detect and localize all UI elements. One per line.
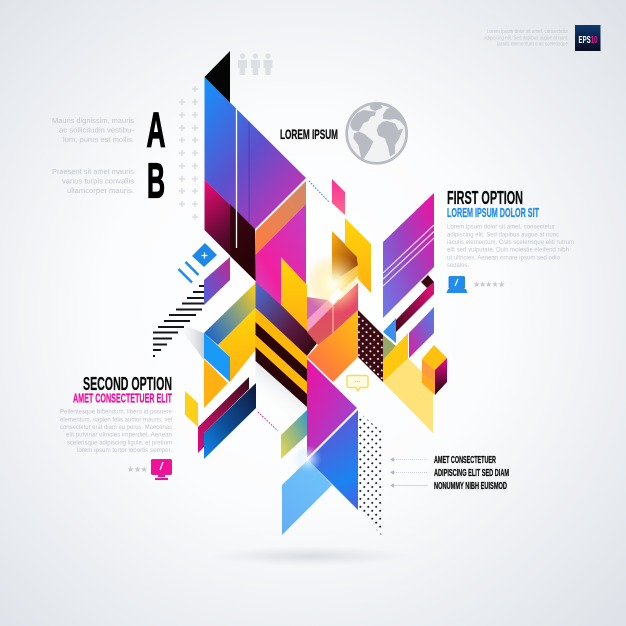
letter A: A: [146, 104, 166, 158]
shape: yellow stripes: [256, 308, 307, 369]
shape: tan band: [256, 181, 306, 255]
arrow row one: AMET CONSECTETUER: [434, 455, 496, 466]
shape: orange lower panel: [307, 310, 358, 382]
shape: light blue parallelogram: [282, 460, 332, 535]
shape: dark red band: [396, 275, 434, 332]
shape: small purple panel: [204, 257, 230, 305]
icon: cube: [422, 345, 447, 395]
shape: yellow center bar: [281, 257, 307, 331]
text block: left notes: ullamcorper mauris.: [67, 186, 134, 195]
paragraph: second option: elit pulvinar ultricies imperdiet. Aenean: [66, 432, 172, 439]
text block: top right note: adipiscing elit. Sed dapibus augue at nunc: [484, 36, 568, 42]
rating stars: five: ★: [498, 280, 505, 289]
paragraph: second option: [60, 408, 172, 454]
shape: pink small bar: [332, 179, 345, 215]
icon: laptop: [446, 276, 468, 293]
list: three labelled arrows: [390, 455, 509, 492]
rating stars: three: ★: [140, 465, 148, 474]
rating stars: five: ★: [485, 280, 492, 289]
rating stars: five: ★: [492, 280, 499, 289]
subheading: amet consectetuer elit: AMET CONSECTETUER ELIT: [73, 391, 172, 405]
rating stars: five: ★: [473, 280, 480, 289]
glow: blue light: [294, 445, 322, 473]
shape: dark vertical strip: [230, 204, 256, 281]
text block: left notes: Mauris dignissim, mauris: [52, 116, 134, 125]
text block: left notes: varius turpis convallis: [62, 176, 134, 186]
icon: three people: [238, 53, 272, 75]
badge: EPS 10: [575, 25, 600, 51]
shape: magenta dark bar: [198, 377, 249, 453]
icon: blue diamond with plus: [192, 243, 217, 267]
heading: first option: FIRST OPTION: [447, 188, 523, 208]
shadow under left blocks: [175, 322, 204, 360]
shape: lilac and peach centre: [307, 297, 328, 320]
shape: purple blue small panel: [409, 307, 434, 358]
shape: large blue purple block: [204, 77, 306, 229]
paragraph: first option: Lorem ipsum dolor sit amet, consectetur: [447, 224, 555, 230]
shape: blue left block: [204, 333, 230, 382]
paragraph: first option: elit sed vulputate. Duis molestie eleifend nibh: [447, 247, 569, 254]
shape: blue lower block: [308, 410, 358, 510]
paragraph: first option: adipiscing elit. Sed dapibus augue at nunc: [447, 231, 559, 238]
text block: top right note: Lorem ipsum dolor sit amet, consectetur: [487, 29, 568, 35]
dotted line pink: [258, 412, 278, 431]
text block: left notes: lum, purus est mollis.: [63, 135, 134, 144]
black hatching stripes: [153, 286, 204, 356]
shape: magenta lower triangle: [307, 359, 357, 457]
paragraph: second option: scelerisque adipiscing ligula, et pretium: [67, 439, 172, 446]
rating stars: five: [473, 280, 505, 289]
shape: magenta dark block: [204, 180, 256, 281]
shape: magenta center: [256, 204, 307, 330]
paragraph: first option: sodales.: [447, 262, 469, 269]
icon: speech bubble: [347, 376, 368, 391]
rating stars: five: ★: [479, 280, 486, 289]
shape: strong yellow panel: [383, 333, 408, 382]
paragraph: second option: elementum, sapien felis auctor mauris, vel: [60, 416, 172, 423]
paragraph: second option: consectetur erat diam eu purus. Maecenas: [60, 424, 172, 431]
heading: lorem ipsum: LOREM IPSUM: [280, 126, 338, 142]
shape: blue dark bar: [204, 383, 256, 459]
shape: pale yellow panel: [383, 358, 433, 433]
shape: blue green small pieces: [383, 318, 396, 360]
paragraph: second option: lorem ipsum tortor lobortis semper.: [77, 447, 172, 454]
decorative white and purple vertical lines: [236, 109, 238, 248]
text block: left notes: Praesent sit amet mauris: [52, 167, 134, 176]
rating stars: three: ★: [127, 465, 134, 474]
rating stars: three: [127, 465, 148, 474]
icon: monitor: [152, 460, 172, 480]
shape: black triangle top: [204, 51, 230, 103]
blue slashes: [178, 262, 198, 282]
ground shadow: [210, 546, 410, 566]
shape: green yellow parallelogram: [281, 410, 307, 459]
shadow under stripes: [256, 361, 307, 433]
arrow row two: ADIPISCING ELIT SED DIAM: [434, 468, 509, 479]
icon: globe: [347, 103, 408, 163]
shape: dark diagonal band: [256, 282, 318, 356]
shape: orange left block: [204, 359, 228, 408]
shape: small yellow bar: [185, 391, 198, 427]
pattern: black dots: [358, 411, 383, 537]
text block: second option: [60, 374, 172, 454]
subheading: lorem ipsum dolor sit: LOREM IPSUM DOLOR SIT: [447, 206, 539, 220]
shape: yellow right bar: [345, 218, 371, 293]
text block: left notes: [52, 116, 134, 195]
dotted line blue: [309, 181, 329, 202]
letter B: B: [147, 154, 165, 208]
text block: top right note: iaculis elementum cras scelerisque: [497, 42, 568, 48]
panel: main geometric composition: [153, 51, 447, 537]
shape: teal yellow band: [204, 283, 256, 345]
text block: first option: [447, 188, 574, 269]
shape: red centre panel: [307, 283, 358, 345]
shape: yellow left block: [218, 308, 256, 382]
arrow row three: NONUMMY NIBH EUISMOD: [434, 481, 507, 492]
paragraph: first option: ut ultricies. Aenean ornare ipsum sed odio: [447, 254, 560, 261]
heading: second option: SECOND OPTION: [83, 374, 172, 394]
shape: orange top band: [332, 231, 358, 285]
paragraph: second option: Pellentesque bibendum, libero id posuere: [60, 408, 172, 416]
pattern: dark dotted panel: [358, 310, 383, 382]
glow: centre light flare: [304, 254, 364, 314]
paragraph: first option: iaculis elementum. Cras scelerisque eliti rutrum: [447, 239, 574, 246]
text block: left notes: ac sollicitudin vestibu-: [59, 126, 134, 134]
shape: purple right panel with stripes: [383, 193, 434, 318]
text block: top right note: [484, 29, 568, 48]
white diamond highlight: [328, 288, 343, 305]
badge: EPS 10: EPS10: [578, 35, 598, 46]
plus sign grid: [179, 86, 198, 220]
rating stars: three: ★: [134, 465, 141, 474]
paragraph: first option: [447, 224, 574, 269]
